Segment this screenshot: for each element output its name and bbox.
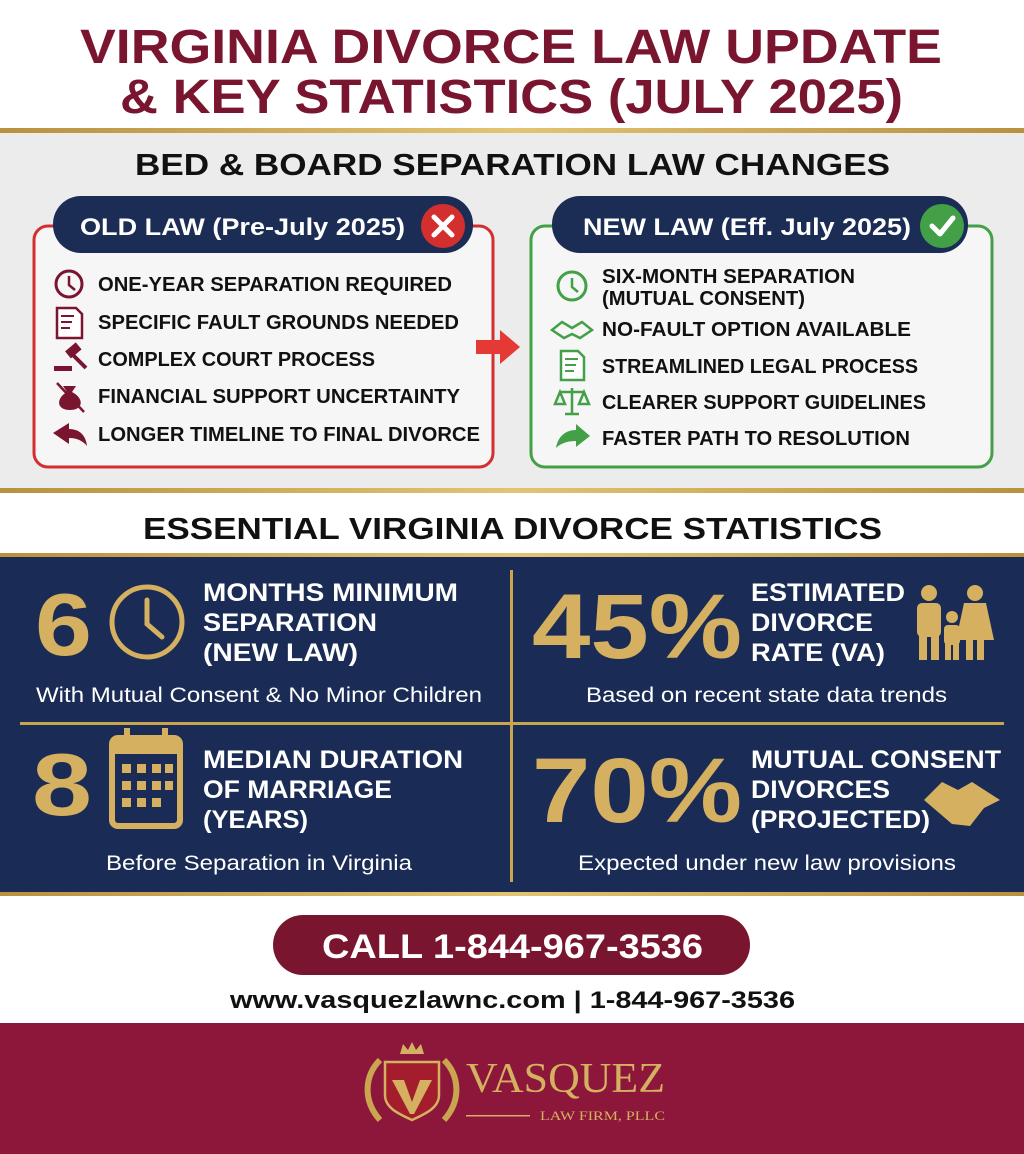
stat: 45%: 45%	[532, 576, 742, 678]
old law items: ONE-YEAR SEPARATION REQUIRED	[98, 274, 452, 296]
stat: 8 years	[32, 728, 463, 875]
heading: statistics: ESSENTIAL VIRGINIA DIVORCE STATISTICS	[143, 511, 882, 546]
old law items: SPECIFIC FAULT GROUNDS NEEDED	[98, 312, 459, 334]
logo: LAW FIRM, PLLC	[540, 1108, 665, 1123]
panel: new law	[531, 196, 992, 467]
title: VIRGINIA DIVORCE LAW UPDATE	[80, 21, 942, 74]
new law header pill	[552, 196, 968, 253]
icon: handshake	[924, 782, 1000, 826]
new law items: NO-FAULT OPTION AVAILABLE	[602, 319, 911, 341]
new law items: SIX-MONTH SEPARATION	[602, 266, 855, 288]
stat: 8 years: 8	[32, 735, 92, 834]
stat: 8 years: (YEARS)	[203, 806, 308, 834]
old law items: COMPLEX COURT PROCESS	[98, 349, 375, 371]
stat: 45%	[532, 576, 994, 707]
new law items: FASTER PATH TO RESOLUTION	[602, 428, 910, 450]
new law items: CLEARER SUPPORT GUIDELINES	[602, 392, 926, 414]
stat: 6 months: 6	[35, 575, 92, 674]
logo: VASQUEZ	[466, 1056, 665, 1102]
call to action button	[273, 915, 750, 975]
panel: old law	[34, 196, 493, 467]
stat: 45%: DIVORCE	[751, 609, 873, 637]
stat: 8 years: MEDIAN DURATION	[203, 746, 463, 774]
logo	[368, 1042, 665, 1123]
footer	[0, 1023, 1024, 1154]
title	[80, 21, 942, 124]
new law items: (MUTUAL CONSENT)	[602, 288, 805, 310]
stat: 45%: Based on recent state data trends	[586, 684, 947, 707]
stat: 70%: DIVORCES	[751, 776, 890, 804]
icon: calendar	[112, 728, 180, 826]
new law header pill: NEW LAW (Eff. July 2025)	[583, 214, 911, 241]
stat: 6 months	[35, 575, 482, 707]
arrow: old to new	[476, 330, 520, 364]
stat: 70%: (PROJECTED)	[751, 806, 930, 834]
stat: 70%: 70%	[532, 740, 742, 842]
stat: 8 years: Before Separation in Virginia	[106, 852, 412, 875]
panel: statistics	[0, 553, 1024, 896]
panel: law changes	[0, 128, 1024, 493]
new law items: STREAMLINED LEGAL PROCESS	[602, 356, 918, 378]
stat: 8 years: OF MARRIAGE	[203, 776, 392, 804]
old law header pill: OLD LAW (Pre-July 2025)	[80, 214, 405, 241]
stat: 6 months: SEPARATION	[203, 609, 377, 637]
old law items: FINANCIAL SUPPORT UNCERTAINTY	[98, 386, 461, 408]
call to action button: CALL 1-844-967-3536	[322, 928, 703, 966]
stat: 6 months: (NEW LAW)	[203, 639, 358, 667]
stat: 45%: ESTIMATED	[751, 579, 905, 607]
icon: family	[917, 585, 994, 660]
stat: 70%: MUTUAL CONSENT	[751, 746, 1001, 774]
new law items	[552, 266, 926, 450]
stat: 70%: Expected under new law provisions	[578, 852, 956, 875]
stat: 6 months: With Mutual Consent & No Minor Children	[36, 684, 482, 707]
website and phone: www.vasquezlawnc.com | 1-844-967-3536	[229, 987, 795, 1014]
stat: 45%: RATE (VA)	[751, 639, 885, 667]
old law header pill	[53, 196, 473, 253]
title: & KEY STATISTICS (JULY 2025)	[120, 71, 903, 124]
old law items: LONGER TIMELINE TO FINAL DIVORCE	[98, 424, 480, 446]
old law items	[53, 271, 480, 446]
stat: 70%	[532, 740, 1001, 875]
stat: 6 months: MONTHS MINIMUM	[203, 579, 458, 607]
heading: law changes: BED & BOARD SEPARATION LAW CHANGES	[135, 147, 890, 182]
